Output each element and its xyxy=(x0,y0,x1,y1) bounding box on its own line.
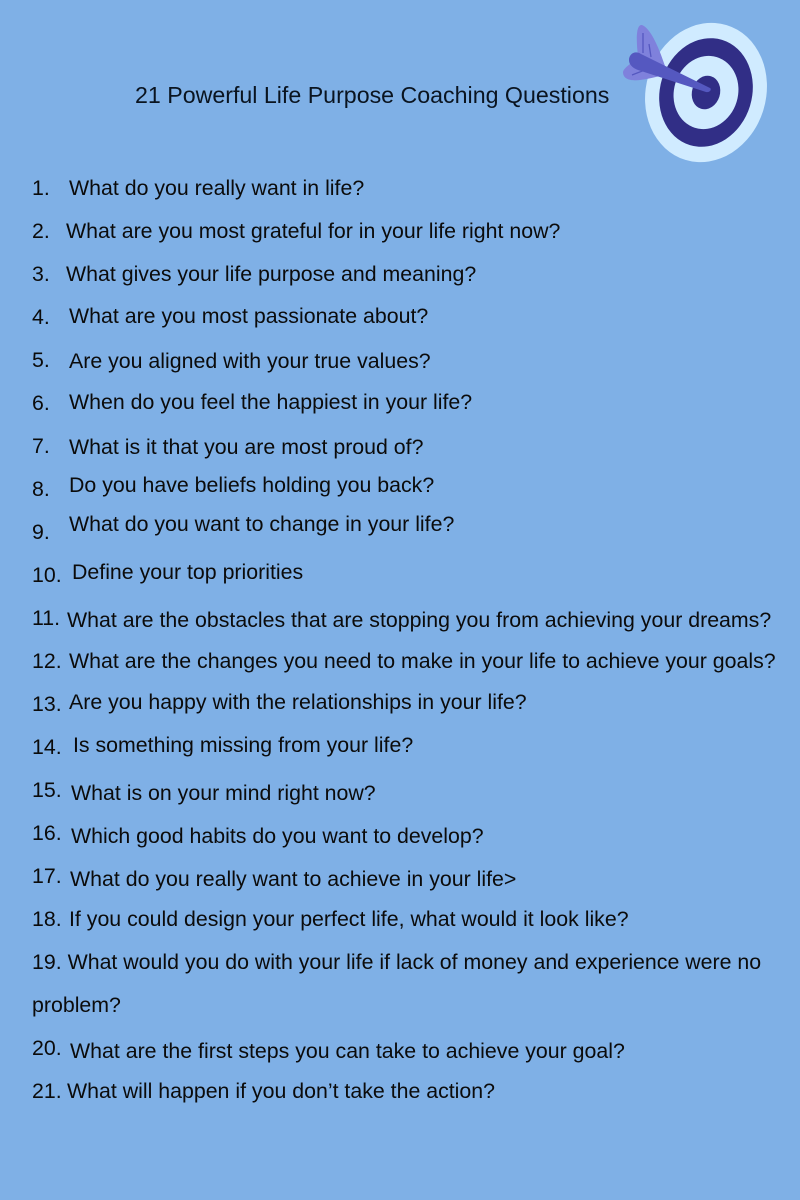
question 7: What is it that you are most proud of? xyxy=(69,435,424,459)
question 3: What gives your life purpose and meaning? xyxy=(66,262,476,286)
question 12: What are the changes you need to make in your life to achieve your goals? xyxy=(69,649,776,673)
question 11: What are the obstacles that are stopping you from achieving your dreams? xyxy=(67,608,771,632)
question 21: What will happen if you don’t take the action? xyxy=(67,1079,495,1103)
question 15: 15. xyxy=(32,778,62,802)
question 6: 6. xyxy=(32,391,50,415)
question 16: 16. xyxy=(32,821,62,845)
question 15: What is on your mind right now? xyxy=(71,781,376,805)
question 13: Are you happy with the relationships in your life? xyxy=(69,690,527,714)
question 9 xyxy=(32,512,454,544)
question 6: When do you feel the happiest in your life? xyxy=(69,390,472,414)
question 2: 2. xyxy=(32,219,50,243)
question 18: 18. xyxy=(32,907,62,931)
question 9: What do you want to change in your life? xyxy=(69,512,454,536)
question 9: 9. xyxy=(32,520,50,544)
question 19 xyxy=(32,950,761,1017)
question 10: 10. xyxy=(32,563,62,587)
question 10: Define your top priorities xyxy=(72,560,303,584)
question 7: 7. xyxy=(32,434,50,458)
question 19: 19. What would you do with your life if lack of money and experience were no xyxy=(32,950,761,974)
question 3: 3. xyxy=(32,262,50,286)
question 4: What are you most passionate about? xyxy=(69,304,428,328)
question 17: 17. xyxy=(32,864,62,888)
question 14: Is something missing from your life? xyxy=(73,733,413,757)
question 2: What are you most grateful for in your life right now? xyxy=(66,219,560,243)
question 20: 20. xyxy=(32,1036,62,1060)
question 5: Are you aligned with your true values? xyxy=(69,349,431,373)
question 21: 21. xyxy=(32,1079,62,1103)
question 11: 11. xyxy=(32,606,60,630)
question 1: What do you really want in life? xyxy=(69,176,364,200)
question 20: What are the first steps you can take to achieve your goal? xyxy=(70,1039,625,1063)
question 8: 8. xyxy=(32,477,50,501)
question 8: Do you have beliefs holding you back? xyxy=(69,473,434,497)
question 18: If you could design your perfect life, what would it look like? xyxy=(69,907,629,931)
icon: target with dart xyxy=(623,8,784,177)
question 5: 5. xyxy=(32,348,50,372)
question 17: What do you really want to achieve in your life> xyxy=(70,867,516,891)
question 13: 13. xyxy=(32,692,62,716)
question 12: 12. xyxy=(32,649,62,673)
question 1: 1. xyxy=(32,176,50,200)
title: 21 Powerful Life Purpose Coaching Questions xyxy=(135,82,609,108)
question 19: problem? xyxy=(32,993,121,1017)
question 14: 14. xyxy=(32,735,62,759)
question 16: Which good habits do you want to develop? xyxy=(71,824,484,848)
question 4: 4. xyxy=(32,305,50,329)
